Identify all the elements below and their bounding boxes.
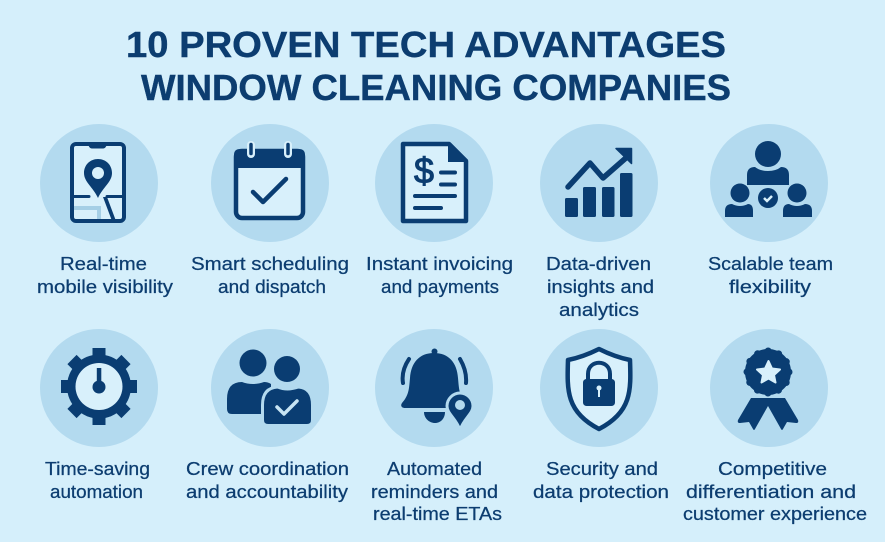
label: [186, 458, 349, 502]
icon: gear with clock: [61, 348, 137, 425]
icon: invoice document: $: [414, 150, 434, 191]
label: [708, 253, 833, 297]
panel: time-saving automation: [40, 329, 158, 502]
label: and payments: [381, 276, 499, 297]
label: Data-driven: [546, 253, 651, 274]
icon: shield with padlock: [568, 349, 630, 429]
label: flexibility: [729, 276, 812, 297]
label: Smart scheduling: [191, 253, 349, 274]
panel: real-time mobile visibility: [37, 124, 174, 297]
icon: two people with check: [227, 350, 312, 426]
label: Automated: [387, 458, 482, 479]
label: [683, 458, 867, 524]
label: Time-saving: [45, 458, 150, 479]
title: [126, 24, 731, 108]
label: and accountability: [186, 481, 349, 502]
label: mobile visibility: [37, 276, 174, 297]
icon: team with check: [725, 141, 812, 217]
icon: calendar with check: [234, 144, 305, 218]
label: [533, 458, 669, 502]
label: [371, 458, 502, 524]
icon: award ribbon: [738, 348, 798, 430]
icon: rising bar chart: [565, 148, 632, 217]
panel: automated reminders and real-time ETAs: [371, 329, 502, 524]
label: customer experience: [683, 503, 867, 524]
label: reminders and: [371, 481, 498, 502]
label: [366, 253, 513, 297]
icon: invoice document: [403, 143, 468, 221]
panel: competitive differentiation and customer experience: [683, 329, 867, 524]
panel: smart scheduling and dispatch: [191, 124, 349, 297]
label: real-time ETAs: [373, 503, 502, 524]
label: [546, 253, 654, 320]
icon: bell with map pin: [401, 348, 473, 430]
label: differentiation and: [686, 481, 856, 502]
label: data protection: [533, 481, 669, 502]
label: Security and: [546, 458, 658, 479]
panel: data-driven insights and analytics: [540, 124, 658, 320]
label: [45, 458, 150, 502]
label: and dispatch: [218, 276, 326, 297]
title: 10 PROVEN TECH ADVANTAGES: [126, 24, 726, 65]
label: Competitive: [718, 458, 827, 479]
panel: instant invoicing and payments: [366, 124, 513, 297]
panel: security and data protection: [533, 329, 669, 502]
panel: crew coordination and accountability: [186, 329, 349, 502]
icon: phone with map pin: [72, 143, 124, 221]
label: Crew coordination: [186, 458, 349, 479]
label: Real-time: [60, 253, 147, 274]
label: analytics: [559, 299, 639, 320]
label: Instant invoicing: [366, 253, 513, 274]
label: automation: [50, 481, 143, 502]
label: [191, 253, 349, 297]
label: insights and: [547, 276, 654, 297]
label: Scalable team: [708, 253, 833, 274]
label: [37, 253, 174, 297]
panel: scalable team flexibility: [708, 124, 833, 297]
title: WINDOW CLEANING COMPANIES: [141, 67, 731, 108]
